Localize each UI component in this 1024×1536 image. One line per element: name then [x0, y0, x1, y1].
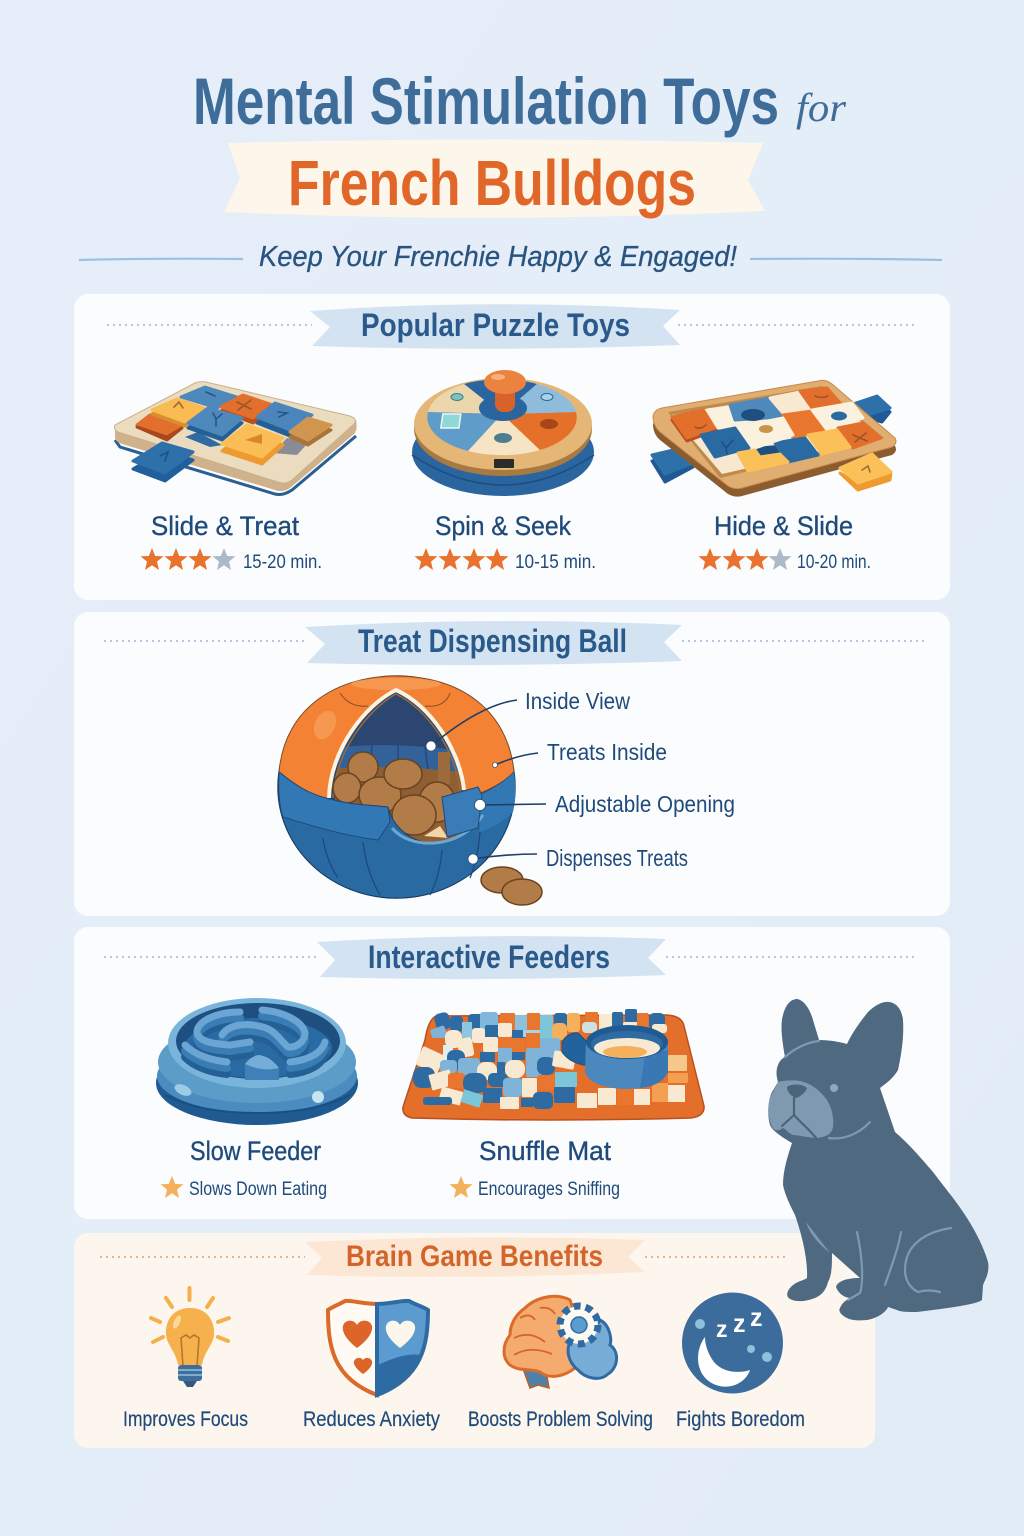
label: Hide & Slide: Hide & Slide [714, 511, 853, 541]
callout: Inside View: Inside View [525, 688, 630, 714]
rating: Hide & Slide: 10-20 min. [797, 552, 871, 573]
bowl on mat [562, 1025, 668, 1089]
label: Snuffle Mat: Snuffle Mat [479, 1136, 611, 1166]
mat fabric strips [413, 1009, 688, 1109]
label: Spin & Seek: Spin & Seek [435, 511, 571, 541]
label: Reduces Anxiety: Reduces Anxiety [303, 1408, 440, 1431]
icon: sleeping moon: z [716, 1316, 728, 1342]
icon: snuffle mat [403, 1009, 704, 1120]
label: Fights Boredom: Fights Boredom [676, 1408, 805, 1431]
rating: Spin & Seek [414, 548, 596, 573]
label: Slow Feeder: Slow Feeder [190, 1136, 321, 1166]
diagram: ball cutaway [278, 676, 542, 905]
note: Encourages Sniffing [450, 1176, 620, 1200]
eye [830, 1084, 838, 1092]
panel: brain game benefits [74, 1233, 875, 1448]
label: Improves Focus: Improves Focus [123, 1408, 248, 1431]
callout: Dispenses Treats [468, 845, 688, 871]
nose and mouth [782, 1084, 816, 1138]
icon: sleeping moon: z [750, 1304, 762, 1332]
title: Mental Stimulation Toys [193, 64, 779, 138]
collar and body lines [785, 1041, 951, 1300]
subtitle: Keep Your Frenchie Happy & Engaged! [259, 241, 737, 273]
note: Encourages Sniffing: Encourages Sniffing [478, 1179, 620, 1200]
icon: heart shield [328, 1301, 428, 1395]
callout: Dispenses Treats: Dispenses Treats [546, 845, 688, 871]
heading: Interactive Feeders: Interactive Feeders [368, 939, 610, 975]
icon: slow feeder bowl [156, 998, 358, 1125]
illustration: french bulldog silhouette [768, 999, 988, 1320]
note: Slows Down Eating [160, 1176, 327, 1200]
title ribbon: French Bulldogs: French Bulldogs [288, 147, 696, 219]
icon: sleeping moon: z [733, 1310, 746, 1338]
callout: Adjustable Opening [474, 791, 735, 817]
label: Boosts Problem Solving: Boosts Problem Solving [468, 1408, 653, 1431]
icon: slide and treat puzzle [114, 382, 357, 494]
label: Slide & Treat: Slide & Treat [151, 511, 299, 541]
callout: Adjustable Opening: Adjustable Opening [555, 791, 735, 817]
heading: Treat Dispensing Ball [104, 621, 926, 665]
heading: Brain Game Benefits [100, 1237, 785, 1277]
heading: Popular Puzzle Toys: Popular Puzzle Toys [361, 307, 630, 343]
heading: Brain Game Benefits: Brain Game Benefits [346, 1240, 603, 1273]
panel: interactive feeders [74, 927, 950, 1219]
icon: brain with gear [504, 1296, 617, 1388]
icon: hide and slide puzzle [652, 380, 896, 497]
heading: Interactive Feeders [104, 936, 918, 979]
note: Slows Down Eating: Slows Down Eating [189, 1179, 327, 1200]
panel: popular puzzle toys [74, 294, 950, 600]
rating: Spin & Seek: 10-15 min. [515, 552, 596, 573]
rating: Slide & Treat [140, 548, 322, 573]
rating: Slide & Treat: 15-20 min. [243, 552, 322, 573]
heading: Popular Puzzle Toys [107, 304, 916, 349]
heading: Treat Dispensing Ball: Treat Dispensing Ball [358, 623, 627, 659]
icon: spin and seek puzzle [412, 370, 594, 496]
muzzle [768, 1080, 833, 1138]
title: for [796, 85, 846, 130]
panel: treat dispensing ball [74, 612, 950, 916]
icon: light bulb [151, 1288, 229, 1387]
rating: Hide & Slide [698, 548, 871, 573]
callout: Inside View [426, 688, 630, 751]
icon: sleeping moon [682, 1292, 783, 1394]
callout: Treats Inside [492, 739, 667, 768]
callout: Treats Inside: Treats Inside [547, 739, 667, 765]
